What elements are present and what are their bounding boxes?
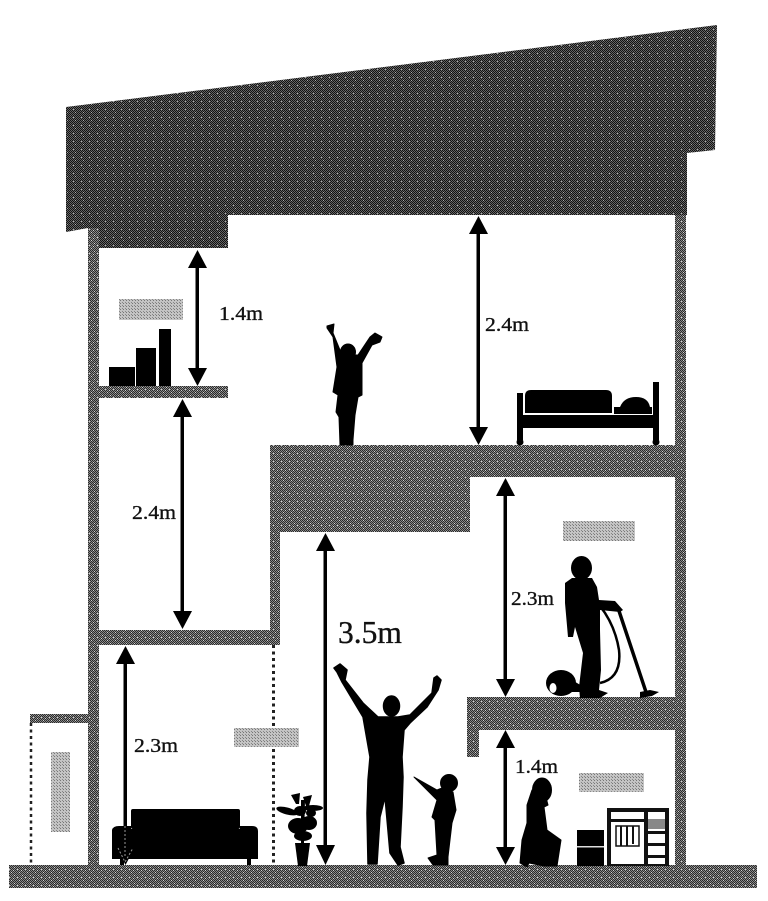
icon: sofa — [112, 809, 258, 865]
roof — [66, 25, 717, 248]
room label: living room — [234, 728, 299, 747]
arrow: top room 2.4m — [469, 216, 488, 445]
height label 2.4m top: 2.4m — [485, 314, 529, 336]
dotted line: carport — [30, 723, 32, 865]
house structure: walls and floors — [88, 215, 686, 865]
books on loft shelf — [109, 329, 171, 386]
arrow: main 3.5m — [316, 533, 335, 865]
height label 2.3m upper right: 2.3m — [511, 588, 554, 610]
silhouette: child pointing — [414, 774, 458, 865]
height label 1.4m loft: 1.4m — [219, 303, 263, 325]
vacuum cleaner — [546, 670, 576, 696]
icon: bed — [516, 382, 660, 446]
arrow: lower right 1.4m — [496, 730, 515, 865]
carport roof — [30, 714, 88, 723]
room label: upper room — [563, 521, 635, 541]
light stroke of arrow over sofa — [118, 826, 133, 862]
height label 2.3m living: 2.3m — [134, 735, 178, 757]
silhouette: girl on upper floor — [327, 324, 382, 445]
arrow: loft 1.4m — [188, 250, 207, 386]
icon: wardrobe — [607, 808, 669, 866]
height label 3.5m: 3.5m — [338, 615, 402, 650]
arrow: upper right 2.3m — [496, 478, 515, 697]
silhouette: kneeling woman — [520, 778, 561, 867]
arrow: living 2.3m — [116, 646, 135, 865]
icon: potted plant — [275, 793, 323, 866]
room label: storage — [579, 773, 644, 792]
height label 1.4m lower right: 1.4m — [515, 756, 558, 778]
carport window label — [51, 752, 70, 832]
silhouette: woman vacuuming — [546, 556, 659, 698]
dotted line: living room opening — [272, 645, 275, 865]
height label 2.4m left: 2.4m — [132, 502, 176, 524]
ground slab — [9, 865, 757, 888]
room label: loft — [119, 299, 183, 320]
silhouette: man with arms raised — [334, 664, 441, 865]
icon: small cabinet — [577, 830, 604, 866]
arrow: lower left 2.4m — [173, 399, 192, 629]
